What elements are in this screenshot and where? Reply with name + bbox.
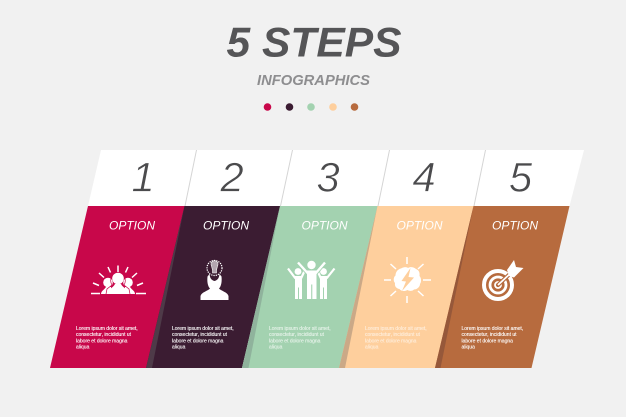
description 5: aliqua (462, 344, 475, 350)
panel: step 4 (339, 154, 474, 368)
title: 5 STEPS (226, 18, 402, 66)
step number 4: 4 (412, 154, 436, 200)
description 5: Lorem ipsum dolor sit amet, (462, 326, 523, 332)
panel: step 3 (242, 154, 378, 368)
description 2: Lorem ipsum dolor sit amet, (172, 326, 234, 332)
description 4: Lorem ipsum dolor sit amet, (365, 326, 427, 332)
description 3: aliqua (269, 344, 283, 350)
panel: step 1 (50, 154, 185, 368)
step number 3: 3 (316, 154, 340, 200)
description 5: consectetur, incididunt ut (462, 332, 517, 338)
description 4: labore et dolore magna (365, 338, 417, 344)
step number 5: 5 (509, 154, 533, 200)
description 1: Lorem ipsum dolor sit amet, (76, 326, 138, 332)
step number 2: 2 (219, 154, 244, 200)
option label 2: OPTION (203, 218, 249, 232)
description 3: labore et dolore magna (269, 338, 321, 344)
option label 4: OPTION (396, 218, 443, 232)
legend dots (264, 103, 358, 111)
panel: step 2 (146, 154, 280, 368)
icon: person with lightbulb (200, 260, 228, 300)
description 3: Lorem ipsum dolor sit amet, (269, 326, 331, 332)
description 3: consectetur, incididunt ut (269, 332, 325, 338)
option label 5: OPTION (492, 218, 538, 232)
description 1: consectetur, incididunt ut (76, 332, 132, 338)
subtitle: INFOGRAPHICS (257, 72, 370, 89)
icon: team with rays (91, 266, 146, 294)
description 1: aliqua (76, 344, 90, 350)
icon: target with arrow (484, 260, 524, 299)
step number 1: 1 (131, 154, 155, 200)
description 2: consectetur, incididunt ut (172, 332, 228, 338)
panel shadow 5 (435, 206, 474, 368)
description 2: aliqua (172, 344, 186, 350)
number header band (88, 150, 584, 206)
description 2: labore et dolore magna (172, 338, 224, 344)
option label 1: OPTION (109, 218, 155, 232)
description 4: consectetur, incididunt ut (365, 332, 421, 338)
option label 3: OPTION (301, 218, 348, 232)
icon: brain with lightning and rays (384, 257, 431, 303)
description 1: labore et dolore magna (76, 338, 128, 344)
description 5: labore et dolore magna (462, 338, 513, 344)
description 4: aliqua (365, 344, 379, 350)
panel shadow 4 (339, 206, 378, 368)
icon: three people cheering (288, 261, 334, 299)
panel shadow 3 (242, 206, 280, 368)
panel: step 5 (435, 154, 570, 368)
panel shadow 2 (146, 206, 184, 368)
